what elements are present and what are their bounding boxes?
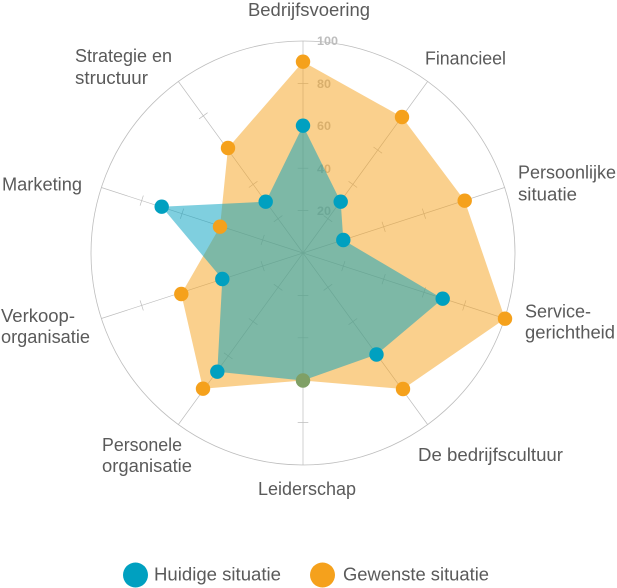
label: Persoonlijke situatie [518, 162, 616, 204]
label: Persoonlijke situatie: situatie [518, 184, 577, 204]
label: Strategie en structuur: Strategie en [75, 46, 172, 66]
legend item: huidige situatie: Huidige situatie [154, 564, 281, 584]
label: Bedrijfsvoering: Bedrijfsvoering [248, 0, 370, 20]
legend item: huidige situatie [123, 562, 281, 588]
radar grid [91, 41, 515, 465]
label: Personele organisatie [102, 435, 192, 476]
label: Verkoop-organisatie: Verkoop- [1, 306, 75, 326]
scale labels: 80 [317, 77, 331, 91]
scale labels: 100 [317, 34, 338, 48]
label: Verkoop-organisatie [1, 306, 90, 347]
point: overlapping values at Leiderschap [296, 373, 310, 388]
points: huidige situatie [154, 118, 450, 379]
scale labels: 60 [317, 119, 331, 133]
area: gewenste situatie [181, 62, 505, 389]
legend item: gewenste situatie [310, 562, 489, 588]
label: Personele organisatie: organisatie [102, 456, 192, 476]
label: Financieel: Financieel [425, 48, 506, 68]
label: Service-gerichtheid: gerichtheid [525, 322, 615, 342]
label: Verkoop-organisatie: organisatie [1, 327, 90, 347]
label: Strategie en structuur: structuur [75, 68, 148, 88]
label: Service-gerichtheid [525, 302, 615, 342]
points: gewenste situatie [174, 54, 512, 396]
label: Persoonlijke situatie: Persoonlijke [518, 162, 616, 182]
legend [123, 562, 489, 588]
scale labels: 40 [317, 162, 331, 176]
label: Marketing: Marketing [2, 174, 82, 194]
scale labels: 20 [317, 204, 331, 218]
area: huidige situatie [162, 126, 443, 380]
legend item: gewenste situatie: Gewenste situatie [343, 564, 489, 584]
label: Service-gerichtheid: Service- [525, 302, 591, 322]
label: Personele organisatie: Personele [102, 435, 182, 455]
label: Strategie en structuur [75, 46, 172, 88]
scale labels [317, 34, 338, 218]
label: De bedrijfscultuur: De bedrijfscultuur [418, 445, 563, 465]
label: Leiderschap: Leiderschap [258, 479, 356, 499]
